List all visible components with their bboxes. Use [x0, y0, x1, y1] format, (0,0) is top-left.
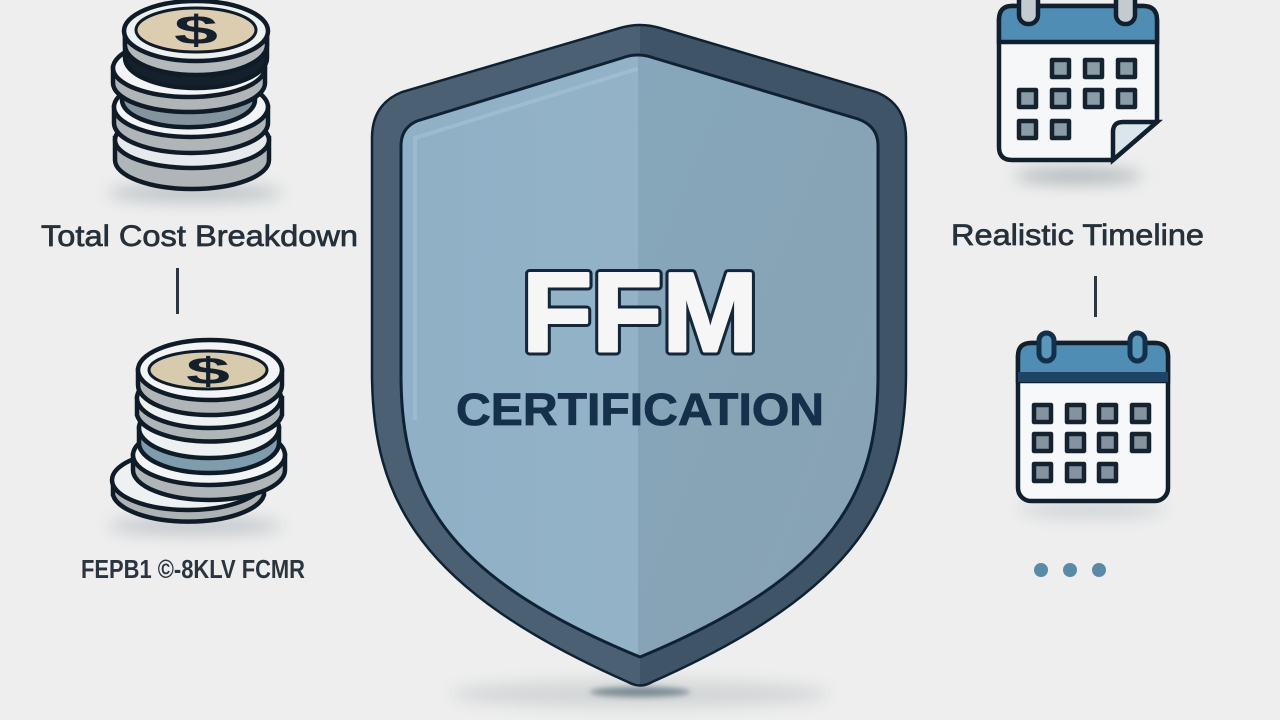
connector: timeline line [1094, 276, 1097, 317]
icon: upper calendar with folded corner [999, 0, 1157, 183]
panel: shield emblem [372, 20, 910, 708]
icon: upper coin stack [107, 1, 283, 202]
connector: cost line [176, 268, 179, 314]
dollar sign: $ [186, 351, 230, 393]
calendar rings [1019, 0, 1135, 24]
label: garbled cost caption: FEPB1 ©-8KLV FCMR [81, 554, 305, 584]
icon: lower coin stack [107, 340, 285, 535]
shield title: FFM: FFM [522, 250, 758, 375]
shield title: FFM: FFM [522, 250, 758, 375]
label: realistic timeline: Realistic Timeline [951, 219, 1204, 252]
label: total cost breakdown: Total Cost Breakdown [41, 220, 358, 253]
calendar rings [1039, 333, 1145, 361]
dollar sign: $ [174, 7, 218, 53]
ellipsis dots [1034, 563, 1106, 577]
icon: lower calendar [1017, 333, 1168, 517]
calendar day squares [1019, 60, 1135, 138]
calendar day squares [1034, 405, 1149, 481]
folded page corner [1113, 122, 1157, 160]
shield subtitle: certification: CERTIFICATION [456, 384, 824, 435]
